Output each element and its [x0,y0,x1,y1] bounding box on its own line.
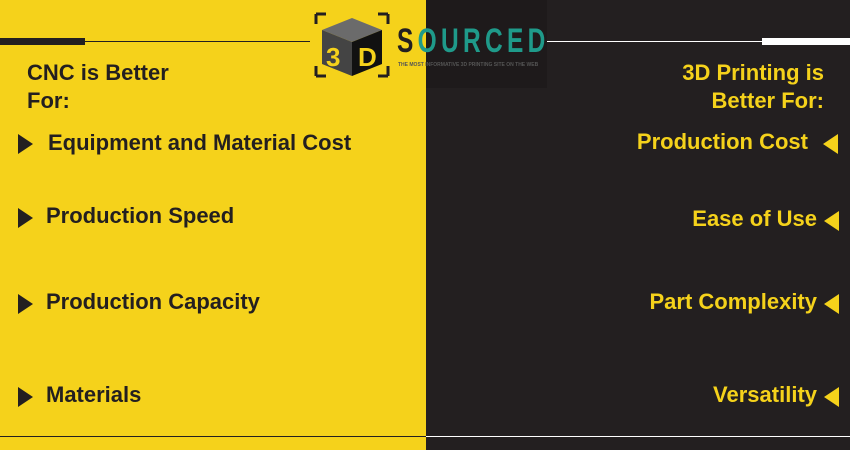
heading: 3D printing [682,60,824,113]
right items: Production Cost [637,129,808,154]
text: Equipment and Material Cost [48,130,351,155]
text: Ease of Use [692,206,817,231]
heading: 3D printing: Better For: [712,88,824,113]
text: Materials [46,382,141,407]
text: Production Speed [46,203,234,228]
logo: THE MOST INFORMATIVE 3D PRINTING SITE ON THE WEB [398,62,538,68]
icon: 3D cube: D [358,42,377,72]
panel: CNC yellow [0,0,426,450]
heading: CNC [27,60,169,113]
heading: 3D printing: 3D Printing is [682,60,824,85]
logo text: SOURCED [397,22,550,60]
text: Part Complexity [650,289,817,314]
icon: 3D cube [314,12,390,78]
icon: 3D cube: 3 [326,42,340,72]
heading: CNC: CNC is Better [27,60,169,85]
heading: CNC: For: [27,88,70,113]
text: Versatility [713,382,817,407]
logo [314,12,550,78]
text: Production Capacity [46,289,260,314]
left items [18,130,351,155]
